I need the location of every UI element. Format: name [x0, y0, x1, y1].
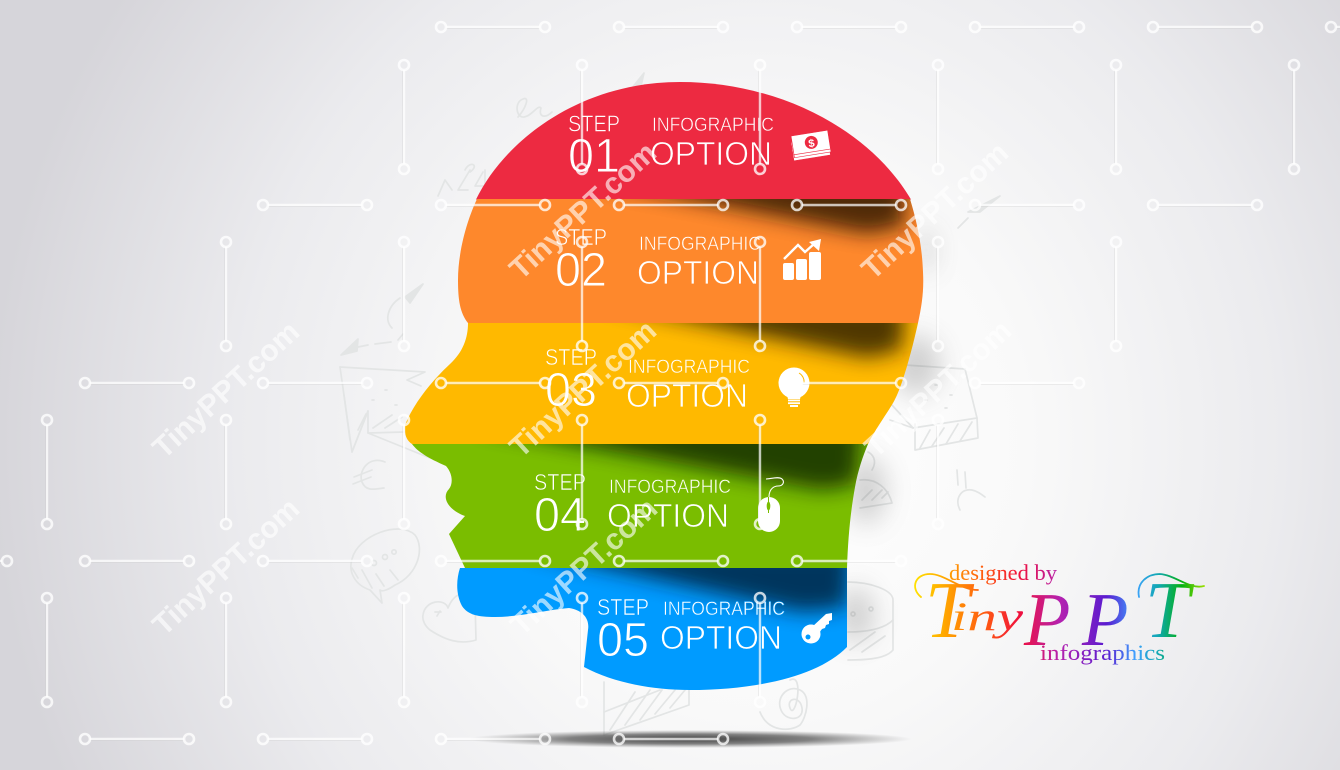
doodle: speech bubble	[351, 529, 419, 603]
step 04 text	[534, 469, 731, 542]
logo: designed by TinyPPT infographics: infographics	[1040, 640, 1165, 665]
icon: money: $	[808, 137, 815, 150]
logo: designed by TinyPPT infographics: designed by	[949, 560, 1057, 585]
outer curl shadows	[838, 226, 940, 643]
band 4 green	[412, 444, 868, 568]
logo: designed by TinyPPT infographics: iny	[951, 594, 1023, 639]
logo: designed by TinyPPT infographics: T	[925, 567, 975, 655]
watermarks: TinyPPT.com	[858, 314, 1018, 464]
icon: growth chart	[783, 239, 821, 280]
logo: designed by TinyPPT infographics: T	[1145, 567, 1195, 655]
watermarks: TinyPPT.com	[146, 315, 306, 465]
step 05 text: INFOGRAPHIC	[663, 598, 785, 620]
doodle: big arrow left	[340, 367, 430, 458]
step 05 text: 05	[597, 614, 649, 667]
step 05 text: STEP	[597, 594, 649, 620]
watermarks: TinyPPT.com	[503, 314, 663, 464]
step 04 text: OPTION	[607, 497, 729, 534]
band 1 red	[476, 82, 911, 200]
band 2 orange	[458, 199, 924, 323]
doodle: triangle top	[632, 73, 644, 90]
step 02 text: INFOGRAPHIC	[639, 233, 761, 255]
step 04 text: INFOGRAPHIC	[609, 476, 731, 498]
doodle: paper plane right	[958, 196, 1000, 228]
step 03 text: OPTION	[626, 377, 748, 414]
watermarks: TinyPPT.com	[504, 492, 664, 642]
icon: light bulb	[778, 368, 810, 407]
doodle: big arrow right	[880, 365, 978, 450]
step 02 text: OPTION	[637, 254, 759, 291]
step 02 text: STEP	[555, 224, 607, 250]
watermarks: TinyPPT.com	[503, 136, 663, 286]
doodle: curved arrows left	[341, 284, 423, 355]
icon: key	[802, 613, 832, 644]
band 5 blue	[457, 568, 847, 690]
step 01 text: 01	[568, 130, 620, 183]
step 03 text: INFOGRAPHIC	[628, 356, 750, 378]
step 01 text: INFOGRAPHIC	[652, 114, 774, 136]
step 03 text: STEP	[545, 344, 597, 370]
step 03 text: 03	[545, 364, 597, 417]
watermarks: TinyPPT.com	[855, 136, 1015, 286]
icon: money	[790, 130, 831, 161]
doodle: cake right	[848, 582, 893, 660]
doodle: small cake	[860, 452, 892, 508]
step 02 text	[555, 224, 761, 297]
logo swashes	[915, 574, 978, 597]
step 05 text: OPTION	[660, 619, 782, 656]
doodle: book bottom	[604, 682, 689, 735]
step 02 text: 02	[555, 244, 607, 297]
doodle: spiral	[760, 679, 807, 729]
step 05 text	[597, 594, 785, 667]
logo: designed by TinyPPT infographics	[915, 560, 1204, 665]
doodle: frown	[957, 470, 985, 510]
step 04 text: 04	[534, 489, 586, 542]
icon: computer mouse	[758, 478, 783, 532]
ground shadow	[468, 730, 912, 748]
doodle: scribble top	[517, 99, 552, 117]
logo: designed by TinyPPT infographics: P	[1023, 578, 1070, 662]
step 01 text: OPTION	[650, 135, 772, 172]
doodle: heart	[423, 593, 476, 642]
step 03 text	[545, 344, 750, 417]
doodle: numbers	[438, 164, 490, 196]
sketch doodles behind head	[340, 73, 1000, 735]
watermarks	[146, 136, 1018, 642]
band 3 yellow	[404, 323, 918, 444]
step 01 text	[568, 110, 774, 183]
step 01 text: STEP	[568, 110, 620, 136]
doodle: euro sign	[353, 460, 385, 489]
logo: designed by TinyPPT infographics: P	[1081, 578, 1128, 662]
step 04 text: STEP	[534, 469, 586, 495]
head silhouette	[400, 82, 930, 693]
watermarks: TinyPPT.com	[146, 492, 306, 642]
